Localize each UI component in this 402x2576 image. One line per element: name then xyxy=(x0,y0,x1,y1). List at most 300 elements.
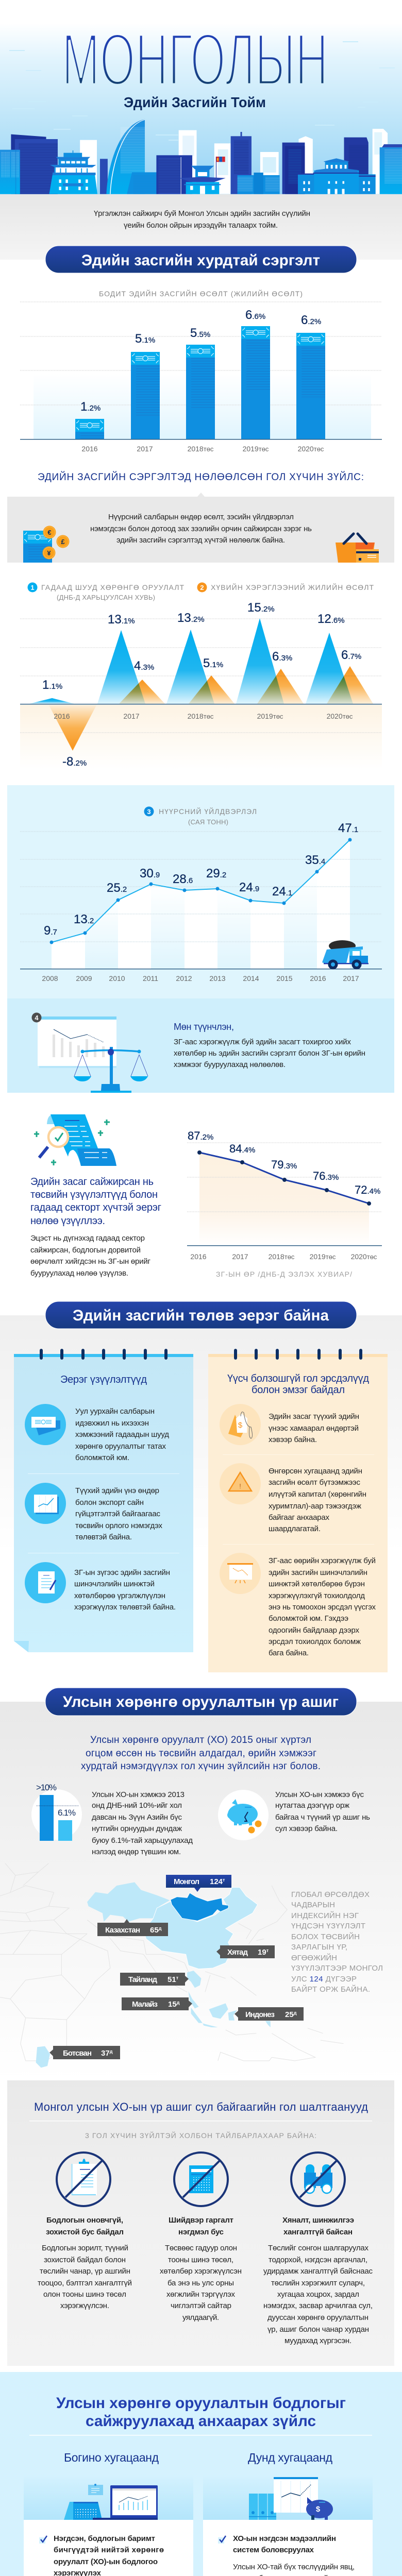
stat text: regional comparison: Улсын ХО-ын хэмжээ бүс xyxy=(275,1790,364,1799)
map: highlighted countries xyxy=(36,1882,271,2067)
section banner: outlook xyxy=(45,1301,357,1329)
risk text 3 xyxy=(269,1556,376,1657)
text: global competitiveness: БОЛОХ ТӨСВИЙН xyxy=(291,1932,360,1941)
year labels: 2012 xyxy=(176,974,192,982)
icon: document and pen xyxy=(25,1562,66,1603)
bar 2020: 2020төс xyxy=(298,445,324,453)
icon: banknotes xyxy=(25,1404,66,1445)
callout: Malaysia: д xyxy=(177,2000,180,2005)
callout: Mongolia xyxy=(166,1875,231,1892)
callout: Botswana xyxy=(49,2046,120,2059)
card: short term xyxy=(24,2520,193,2576)
reason 3 text: Төслийг сонгон шалгаруулах xyxy=(268,2244,369,2252)
callout: Indonesia xyxy=(234,2007,304,2021)
stat: investment size: 6.1% xyxy=(58,1808,76,1818)
panel text xyxy=(90,513,312,545)
indicator text 2: болон экспорт сайн xyxy=(75,1498,144,1507)
risk text 1: хэвээр байна. xyxy=(269,1435,317,1444)
reason 1 text: Бодлогын зорилт, түүний xyxy=(42,2244,128,2252)
panel: fiscal adjustment xyxy=(7,998,394,1093)
year labels: 2016 xyxy=(190,1252,207,1261)
value labels: 12.6% xyxy=(317,612,345,626)
icon: debt chart card with scales xyxy=(32,1013,148,1093)
chart legend: coal: НҮҮРСНИЙ ҮЙЛДВЭРЛЭЛ xyxy=(159,807,257,816)
heading xyxy=(227,1373,369,1396)
year labels: 2017 xyxy=(232,1252,248,1261)
intro text: Үргэлжлэн сайжирч буй Монгол Улсын эдийн засгийн сүүлийн xyxy=(94,209,310,218)
risk text 1: Эдийн засаг түүхий эдийн xyxy=(269,1412,359,1421)
chart legend: coal: (САЯ ТОНН) xyxy=(188,818,228,826)
stat text: investment size xyxy=(92,1790,193,1856)
reason 3 text: удирдамж хангалтгүй байснаас xyxy=(263,2267,373,2276)
reason 3 text: нэмэгдэх, засвар арчилгаа сул, xyxy=(263,2301,373,2310)
text: conclusion: өөрчлөлт хийгдсэн нь ЗГ-ын өрийг xyxy=(30,1257,151,1266)
risk text 2: Өнгөрсөн хугацаанд эдийн xyxy=(269,1467,362,1476)
item: information system: Улсын ХО-тай бүх төслүүдийн явц, xyxy=(233,2563,355,2571)
icon: broken piggy bank xyxy=(218,1790,269,1840)
callout: China xyxy=(216,1945,275,1958)
heading: Монгол улсын ХО-ын үр ашиг сул байгаагийн гол шалтгаанууд xyxy=(34,2100,368,2113)
reason 3 text: үр, ашиг болон чанар хурдан xyxy=(267,2325,369,2334)
indicator text 2: төсвийн орлого нэмэгдэх xyxy=(75,1521,163,1530)
reason 2 title: Шийдвэр гаргалт xyxy=(169,2216,233,2225)
callout: Thailand: Тайланд xyxy=(128,1975,157,1984)
reason 1 title xyxy=(46,2216,124,2236)
chart legend: FDI and consumption xyxy=(28,582,374,601)
reason 2 title xyxy=(169,2216,233,2236)
value labels: 4.3% xyxy=(134,659,154,673)
year labels: 2020төс xyxy=(327,712,353,720)
value labels: 76.3% xyxy=(313,1170,339,1182)
risk text 3: боломжтой юм. Гэхдээ xyxy=(269,1614,348,1623)
year labels: 2017 xyxy=(123,712,140,720)
risk text 1: үнээс хамаарал өндөртэй xyxy=(269,1424,359,1433)
callout: Mongolia: 124 xyxy=(210,1877,223,1886)
value labels: 28.6 xyxy=(173,872,193,886)
heading xyxy=(56,2395,346,2430)
year labels: 2016 xyxy=(310,974,326,982)
value labels: 6.7% xyxy=(341,648,361,662)
icon: banknote and coins: € xyxy=(47,529,52,536)
reason 3 text xyxy=(263,2244,373,2345)
value labels: 79.3% xyxy=(271,1158,297,1171)
section banner: public investment xyxy=(45,1688,357,1716)
bar 2016: 1.2% xyxy=(80,400,100,414)
stat text: regional comparison: сул хэвээр байна. xyxy=(275,1824,338,1833)
year labels: 2014 xyxy=(243,974,259,982)
column heading: short term: Богино хугацаанд xyxy=(64,2451,159,2464)
icon: debt chart card with scales: 4 xyxy=(35,1014,39,1022)
skyline illustration xyxy=(0,120,402,194)
value labels: 13.2% xyxy=(177,611,205,625)
reason 3 text: муудахад хүргэсэн. xyxy=(284,2336,351,2345)
reason 3 title: хангалтгүй байсан xyxy=(283,2228,353,2236)
chart title: real growth: БОДИТ ЭДИЙН ЗАСГИЙН ӨСӨЛТ (ЖИЛИЙН ӨСӨЛТ) xyxy=(99,289,303,298)
icon: warning: ! xyxy=(239,1482,241,1490)
icon: warning xyxy=(220,1463,261,1504)
item: information system: ХО-ын нэгдсэн мэдээллийн xyxy=(233,2534,336,2543)
year labels: 2011 xyxy=(143,974,158,982)
callout: Indonesia: 25 xyxy=(285,2010,294,2019)
clouds xyxy=(9,41,395,141)
value labels: 25.2 xyxy=(107,881,127,895)
value labels: 15.2% xyxy=(247,601,275,615)
reason 1 text: тооцоо, бэлтгэл хангалтгүй xyxy=(38,2279,132,2287)
text: adjustment programme: хэмжээг бууруулахад нөлөөлөв. xyxy=(174,1060,286,1069)
reason 2 text: тооны шинэ төсөл, xyxy=(168,2256,233,2264)
value labels: 5.1% xyxy=(203,656,223,670)
text: conclusion xyxy=(30,1234,151,1278)
icon: basket and card xyxy=(336,534,379,563)
subtitle: Эдийн Засгийн Тойм xyxy=(124,94,266,110)
reason 2 text: хөгжлийн тэргүүлэх xyxy=(166,2290,235,2299)
item: unified policy xyxy=(39,2534,169,2576)
callout: Thailand: т xyxy=(176,1975,179,1980)
year labels: 2016 xyxy=(54,712,70,720)
panel: policy recommendations xyxy=(0,2372,402,2576)
chart legend: coal: 3 xyxy=(147,808,151,816)
heading: Үүсч болзошгүй гол эрсдэлүүд xyxy=(227,1373,369,1384)
bar 2016 xyxy=(75,400,104,453)
illustration: medium term chart and piggy bank xyxy=(203,2475,373,2520)
text: global competitiveness: ҮНДСЭН ҮЗҮҮЛЭЛТ xyxy=(291,1922,365,1930)
bar 2019 xyxy=(241,308,270,453)
heading: сайжруулахад анхаарах зүйлс xyxy=(86,2413,316,2430)
stat text: regional comparison: байгаа ч түүний үр ашиг нь xyxy=(275,1813,370,1822)
column heading: medium term: Дунд хугацаанд xyxy=(248,2451,333,2464)
icon: clipboard crossed out xyxy=(57,2153,110,2206)
callout: Kazakhstan: 65 xyxy=(150,1926,159,1935)
text: global competitiveness: УЛС 124 ДҮГЭЭР xyxy=(291,1975,357,1984)
indicator text 1: хэмжээний гадаадын шууд xyxy=(75,1430,169,1439)
reason 3 text: төслийн хэрэгжилт суларч, xyxy=(271,2279,365,2287)
intro text xyxy=(94,209,310,230)
bar 2016: 2016 xyxy=(81,445,98,453)
risk text 1 xyxy=(269,1412,359,1444)
indicator text 1: боломжтой юм. xyxy=(75,1453,129,1462)
heading: improvement impact xyxy=(30,1176,161,1227)
indicator text 3: ЗГ-ын зүгээс эдийн засгийн xyxy=(74,1568,170,1577)
indicator text 1 xyxy=(75,1407,169,1462)
callout: Thailand: 51 xyxy=(167,1975,176,1984)
text: adjustment programme: хөтөлбөр нь эдийн засгийн сэргэлт болон ЗГ-ын өрийн xyxy=(174,1049,365,1058)
year labels: 2018төс xyxy=(269,1252,295,1261)
heading: improvement impact: Эдийн засаг сайжирсан нь xyxy=(30,1176,154,1188)
risk text 3: бага байна. xyxy=(269,1649,309,1657)
icon: calculator crossed out xyxy=(174,2153,228,2206)
bar 2017: 2017 xyxy=(137,445,153,453)
icon: banknote and coins xyxy=(23,526,69,563)
heading: improvement impact: нөлөө үзүүллээ. xyxy=(30,1215,105,1227)
value labels: 1.1% xyxy=(42,678,62,692)
heading: improvement impact: төсвийн үзүүлэлтүүд болон xyxy=(30,1189,158,1200)
year labels: 2010 xyxy=(109,974,125,982)
bar 2018 xyxy=(186,326,215,453)
indicator text 3: хөтөлбөрөө үргэлжлүүлэн xyxy=(74,1591,165,1600)
callout: Botswana: Ботсван xyxy=(63,2049,92,2058)
panel: reasons for low efficiency xyxy=(7,2080,394,2366)
lead text xyxy=(81,1735,321,1772)
icon: banknote and coins: ¥ xyxy=(47,549,51,557)
value labels: 72.4% xyxy=(355,1183,380,1196)
value labels: 29.2 xyxy=(206,867,226,880)
text: global competitiveness: ЧАДВАРЫН xyxy=(291,1901,335,1909)
year labels: 2009 xyxy=(76,974,92,982)
reason 2 text: Төсвөөс гадуур олон xyxy=(165,2244,237,2252)
text: global competitiveness xyxy=(291,1890,383,1994)
risk text 3: одоогийн байдлаар дээрх xyxy=(269,1626,360,1635)
icon: banknote and coins: £ xyxy=(61,538,65,546)
icon: binoculars crossed out xyxy=(291,2153,345,2206)
bar 2018: 2018төс xyxy=(188,445,214,453)
risk text 3: энэ нь томоохон эрсдэл үүсгэх xyxy=(269,1603,376,1612)
risk text 3: ЗГ-аас өөрийн хэрэгжүүлж буй xyxy=(269,1556,376,1565)
value labels: -8.2% xyxy=(62,755,87,769)
year labels: 2018төс xyxy=(188,712,214,720)
indicator text 2: Түүхий эдийн үнэ өндөр xyxy=(75,1486,159,1495)
subheading: 3 ГОЛ ХҮЧИН ЗҮЙЛТЭЙ ХОЛБОН ТАЙЛБАРЛАХААР БАЙНА: xyxy=(85,2131,316,2140)
year labels xyxy=(54,712,353,720)
year labels: 2015 xyxy=(276,974,293,982)
text: global competitiveness: ҮЗҮҮЛЭЛТЭЭР МОНГОЛ xyxy=(291,1964,383,1973)
illustration: medium term chart and piggy bank: $ xyxy=(316,2505,321,2514)
stat: investment size xyxy=(31,1783,82,1841)
lead text: огцом өссөн нь төсвийн алдагдал, өрийн хэмжээг xyxy=(86,1748,316,1759)
text: global competitiveness: ИНДЕКСИЙН НЭГ xyxy=(291,1911,359,1920)
panel text: нэмэгдсэн болон дотоод зах зээлийн орчин сайжирсан зэрэг нь xyxy=(90,524,312,533)
reason 1 text xyxy=(38,2244,132,2310)
value labels xyxy=(188,1129,380,1196)
value labels xyxy=(42,601,361,769)
bar 2019: 2019төс xyxy=(243,445,269,453)
panel: growth drivers xyxy=(7,493,394,563)
card: medium term xyxy=(203,2520,373,2576)
year labels xyxy=(190,1252,377,1261)
bar chart: real economic growth xyxy=(20,302,382,453)
risk text 3: эдийн засгийн шинэчлэлийн xyxy=(269,1568,367,1577)
value labels: 13.2 xyxy=(74,912,94,926)
map: Mongolia xyxy=(171,1893,229,1921)
section banner: outlook: Эдийн засгийн төлөв эерэг байна xyxy=(73,1307,329,1324)
year labels: 2008 xyxy=(42,974,58,982)
section banner: growth: Эдийн засгийн хурдтай сэргэлт xyxy=(81,252,320,269)
indicator text 1: идэвхжил нь ихээхэн xyxy=(75,1419,149,1428)
chart legend: FDI and consumption: 1 xyxy=(30,584,35,591)
stat text: investment size: буюу 6.1%-тай харьцуулахад xyxy=(92,1836,193,1845)
reason 1 title: Бодлогын оновчгүй, xyxy=(46,2216,123,2225)
heading: болон эмзэг байдал xyxy=(252,1384,345,1396)
text: adjustment programme: Мөн түүнчлэн, xyxy=(174,1022,234,1032)
line chart: coal output xyxy=(20,821,382,982)
panel: risks xyxy=(208,1349,388,1672)
callout: Kazakhstan: д xyxy=(159,1926,162,1931)
year labels: 2019төс xyxy=(310,1252,336,1261)
icon: coal truck xyxy=(322,940,368,970)
callout: Mongolia: т xyxy=(223,1877,225,1883)
indicator text 3 xyxy=(74,1568,176,1612)
panel: coal production xyxy=(7,785,394,998)
chart legend: coal xyxy=(144,807,257,826)
reason 1 title: зохистой бус байдал xyxy=(46,2228,124,2236)
value labels: 24.1 xyxy=(272,885,292,899)
value labels: 35.4 xyxy=(305,853,325,867)
value labels: 84.4% xyxy=(229,1142,255,1155)
text: adjustment programme: ЗГ-аас хэрэгжүүлж буй эдийн засагт тохиргоо хийх xyxy=(174,1038,351,1046)
risk text 2: шаардлагатай. xyxy=(269,1524,321,1533)
callout: Malaysia xyxy=(122,1997,192,2010)
reason 1 text: зохистой байдал болон xyxy=(44,2256,126,2264)
reason 3 text: дууссан хөрөнгө оруулалтын xyxy=(267,2313,368,2322)
value labels: 13.1% xyxy=(108,613,135,626)
risk text 2: хуримтлал)-аар тэжээгдэж xyxy=(269,1502,361,1511)
chart caption: ЗГ-ЫН ӨР /ДНБ-Д ЭЗЛЭХ ХУВИАР/ xyxy=(216,1270,352,1278)
stat text: investment size: нэлээд өндөр түвшин юм. xyxy=(92,1848,181,1856)
item: unified policy: Нэгдсэн, бодлогын баримт xyxy=(54,2534,155,2543)
reason 2 text: чиглэлтэй сайтар xyxy=(171,2301,231,2310)
year labels xyxy=(42,974,359,982)
risk text 2: илүүтэй капитал (хөрөнгийн xyxy=(269,1490,366,1499)
stat text: regional comparison: нутагтаа дээгүүр орж xyxy=(275,1801,349,1810)
reason 2 text: уялдаагүй. xyxy=(182,2313,219,2322)
reason 1 text: хэрэгжүүлсэн. xyxy=(60,2301,109,2310)
reason 2 text xyxy=(160,2244,242,2322)
text: adjustment programme xyxy=(174,1022,365,1069)
indicator text 1: Уул уурхайн салбарын xyxy=(75,1407,155,1416)
illustration: short term laptop and calendar xyxy=(24,2475,193,2520)
risk text 3: эрсдэл тохиолдох боломж xyxy=(269,1637,361,1646)
reason 2 title: нэгдмэл бус xyxy=(178,2228,224,2236)
icon: chart sheet xyxy=(25,1483,66,1524)
bar 2018: 5.5% xyxy=(190,326,210,340)
reason 2 text: ба энэ нь улс орны xyxy=(167,2279,234,2287)
callout: Mongolia: Монгол xyxy=(174,1877,199,1886)
indicator text 2 xyxy=(75,1486,163,1541)
year labels: 2019төс xyxy=(257,712,283,720)
bar 2020: 6.2% xyxy=(301,313,321,327)
section background: outlook xyxy=(0,1315,402,1552)
indicator text 3: шинэчлэлийн шинжтэй xyxy=(74,1580,155,1588)
text: global competitiveness: БАЙРТ ОРЖ БАЙНА. xyxy=(291,1985,370,1994)
stat text: investment size: Улсын ХО-ын хэмжээ 2013 xyxy=(92,1790,185,1799)
reason 3 text: тодорхой, нэгдсэн аргачлал, xyxy=(269,2256,367,2264)
heading: Эерэг үзүүлэлтүүд xyxy=(60,1374,147,1385)
panel text: Нүүрсний салбарын өндөр өсөлт, зэсийн үйлдвэрлэл xyxy=(108,513,294,521)
chart legend: FDI and consumption: ГАДААД ШУУД ХӨРӨНГӨ ОРУУЛАЛТ xyxy=(41,583,184,591)
stat text: investment size: онд ДНБ-ний 10%-ийг хол xyxy=(92,1801,182,1810)
bar 2017 xyxy=(131,332,160,453)
text: conclusion: бууруулахад нөлөө үзүүлэв. xyxy=(30,1269,128,1278)
bar 2019: 6.6% xyxy=(245,308,265,322)
indicator text 2: гүйцэтгэлтэй байгаагаас xyxy=(75,1510,161,1518)
value labels: 30.9 xyxy=(140,867,160,880)
world map background xyxy=(0,1863,344,2061)
reason 1 text: олон тооны шинэ төсөл xyxy=(43,2290,126,2299)
year labels: 2013 xyxy=(209,974,226,982)
title: МОНГОЛЫН xyxy=(62,19,328,101)
bar 2017: 5.1% xyxy=(135,332,155,346)
heading: growth drivers: ЭДИЙН ЗАСГИЙН СЭРГЭЛТЭД НӨЛӨӨЛСӨН ГОЛ ХҮЧИН ЗҮЙЛС: xyxy=(38,471,364,483)
section banner: public investment: Улсын хөрөнгө оруулалтын үр ашиг xyxy=(63,1693,339,1710)
indicator text 2: төлөвтэй байна. xyxy=(75,1533,132,1541)
section banner: growth xyxy=(45,246,357,273)
callout: Kazakhstan: Казахстан xyxy=(105,1926,140,1935)
lead text: хурдтай нэмэгдүүлэх гол хүчин зүйлсийн нэг болов. xyxy=(81,1761,321,1772)
lead text: Улсын хөрөнгө оруулалт (ХО) 2015 оныг хүртэл xyxy=(90,1735,311,1745)
callout: China: т xyxy=(266,1948,269,1953)
callout: Malaysia: 15 xyxy=(168,2000,177,2009)
hero background xyxy=(0,0,402,195)
triangle chart: FDI and private consumption xyxy=(20,601,382,769)
reason 3 text: хугацаа хоцрох, зардал xyxy=(277,2290,359,2299)
grey intro band xyxy=(0,194,402,260)
panel: positive indicators xyxy=(14,1349,193,1652)
indicator text 3: хэрэгжүүлэх төлөвтэй байна. xyxy=(74,1603,176,1612)
callout: China: 19 xyxy=(258,1948,266,1957)
text: conclusion: Эцэст нь дүгнэхэд гадаад сектор xyxy=(30,1234,145,1243)
indicator text 1: хөрөнгө оруулалтыг татах xyxy=(75,1442,166,1451)
year labels: 2020төс xyxy=(351,1252,377,1261)
stat text: investment size: давсан нь Зүүн Азийн бүс xyxy=(92,1813,182,1822)
risk text 2 xyxy=(269,1467,366,1533)
callout: Botswana: д xyxy=(110,2049,113,2054)
callout: China: Хятад xyxy=(227,1948,248,1957)
bar 2020 xyxy=(296,313,325,453)
callout: Botswana: 37 xyxy=(101,2049,110,2058)
text: conclusion: сайжирсан, бодлогын дорвитой xyxy=(30,1246,141,1255)
reason 2 text: хөтөлбөр хэрэгжүүлсэн xyxy=(160,2267,242,2276)
risk text 2: байгааг анхаарах xyxy=(269,1513,330,1522)
value labels xyxy=(44,821,358,938)
reason 3 title: Хяналт, шинжилгээ xyxy=(282,2216,354,2225)
icon: price tag: $ xyxy=(238,1421,243,1430)
risk text 2: засгийн өсөлт бүтээмжээс xyxy=(269,1478,361,1487)
value labels: 47.1 xyxy=(338,821,358,835)
stat text: regional comparison xyxy=(275,1790,370,1833)
reason 3 title xyxy=(282,2216,354,2236)
item: information system: систем боловсруулах xyxy=(233,2546,314,2554)
callout: Indonesia: д xyxy=(294,2010,297,2015)
text: global competitiveness: ЗАРЛАГЫН ҮР, xyxy=(291,1943,347,1952)
chart legend: FDI and consumption: ХҮВИЙН ХЭРЭГЛЭЭНИЙ ЖИЛИЙН ӨСӨЛТ xyxy=(211,583,374,591)
chart legend: FDI and consumption: 2 xyxy=(200,584,204,591)
text: global competitiveness: ӨГӨӨЖИЙН xyxy=(291,1953,337,1962)
icon: receipt and magnifier xyxy=(34,1114,116,1166)
risk text 3: шинжтэй хөтөлбөрөө бүрэн xyxy=(269,1580,365,1588)
intro text: үеийн болон ойрын ирээдүйн талаарх тойм. xyxy=(124,221,278,230)
callout: Thailand xyxy=(120,1973,189,1986)
icon: price tag xyxy=(220,1404,261,1445)
value labels: 87.2% xyxy=(188,1129,213,1142)
item: unified policy: бичгүүдтэй нийтэй хөрөнгө xyxy=(54,2546,164,2554)
risk text 3: хэрэгжүүлэхгүй тохиолдолд xyxy=(269,1591,365,1600)
heading: Улсын хөрөнгө оруулалтын бодлогыг xyxy=(56,2395,346,2412)
reason 1 text: төслийн чанар, үр ашгийн xyxy=(40,2267,130,2276)
item: unified policy: оруулалт (ХО)-ын бодлогоо xyxy=(54,2557,158,2566)
callout: Kazakhstan xyxy=(97,1919,168,1936)
value labels: 6.3% xyxy=(272,650,292,664)
stat text: investment size: нутгийн орнуудын дундаж xyxy=(92,1824,182,1833)
text: global competitiveness: ГЛОБАЛ ӨРСӨЛДӨХ xyxy=(291,1890,370,1899)
item: information system xyxy=(218,2534,355,2576)
chart legend: FDI and consumption: (ДНБ-Д ХАРЬЦУУЛСАН ХУВЬ) xyxy=(57,594,155,601)
year labels: 2017 xyxy=(343,974,359,982)
heading: improvement impact: гадаад секторт хүчтэй эерэг xyxy=(30,1202,161,1213)
area chart: government debt xyxy=(187,1129,382,1278)
callout: Malaysia: Малайз xyxy=(132,2000,158,2009)
section background: public investment xyxy=(0,1702,402,2080)
value labels: 9.7 xyxy=(44,924,57,938)
icon: presentation board xyxy=(220,1553,261,1594)
